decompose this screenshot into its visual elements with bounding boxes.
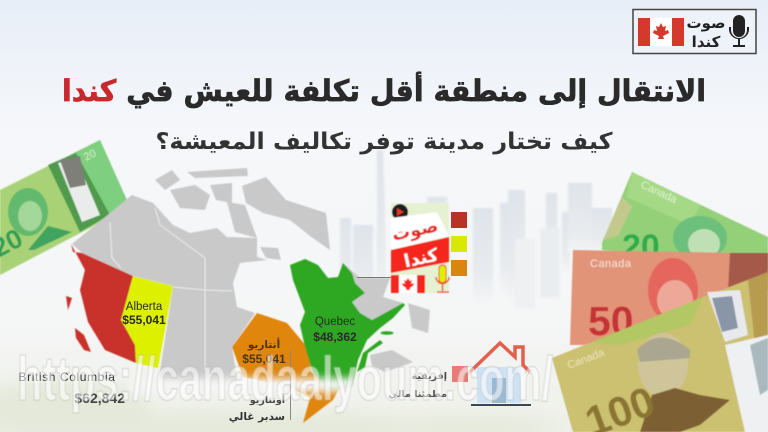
- value: British Columbia: $62,842: [74, 390, 125, 406]
- map: Gaspe crescent: [357, 340, 383, 372]
- banknote: right 20 dollars: [602, 172, 768, 270]
- banknote: 50 dollars: Canada: [590, 258, 632, 270]
- top-right logo: [633, 10, 756, 54]
- red accent: [452, 366, 468, 382]
- banknote: right 20 dollars: 20: [622, 228, 660, 266]
- center logo: [390, 203, 449, 293]
- legend: orange swatch: [451, 260, 467, 276]
- leader line: Ontario: [290, 350, 292, 420]
- label: Ontario note: أونتاريو: [249, 393, 285, 406]
- logo: name: صوت: [687, 14, 725, 32]
- label: real estate note: إفريقية: [412, 371, 447, 382]
- center logo: flag: [391, 275, 425, 293]
- value: Quebec: $48,362: [313, 330, 357, 344]
- label: Ontario: أنتاريو: [247, 337, 280, 351]
- map: province borders: [110, 208, 232, 370]
- subtitle: كيف تختار مدينة توفر تكاليف المعيشة؟: [156, 129, 613, 155]
- map: small island: [380, 331, 394, 335]
- banknote: left 20 dollars: [0, 140, 130, 275]
- map: Ontario: [232, 313, 340, 423]
- label: British Columbia: British Columbia: [19, 370, 115, 384]
- banknote: right 20 dollars: Canada: [639, 179, 680, 206]
- value: Ontario: $55,041: [242, 352, 286, 366]
- center logo: microphone: [436, 265, 449, 292]
- title: الانتقال إلى منطقة أقل تكلفة للعيش في كندا: [62, 72, 706, 109]
- legend: red swatch: [451, 212, 467, 228]
- logo: microphone: [729, 15, 749, 47]
- banknote: 50 dollars: 50: [588, 298, 634, 344]
- label: Quebec: Quebec: [315, 316, 355, 328]
- note: real estate: مطمئنا مالي: [388, 389, 447, 400]
- note: Ontario: سدبر غالي: [229, 411, 285, 423]
- logo: Canadian flag: [638, 18, 684, 46]
- label: Alberta: Alberta: [126, 301, 163, 313]
- map: British Columbia: [71, 244, 136, 363]
- map of Canada: [66, 168, 430, 423]
- value: Alberta: $55,041: [122, 313, 166, 327]
- map: gray provinces and territories: [72, 168, 430, 385]
- center logo: white word band: صوت: [390, 215, 440, 246]
- house icon: [470, 343, 531, 405]
- map: Quebec: [290, 259, 405, 390]
- banknote: 100 dollars: Canada: [566, 346, 607, 372]
- logo: name: كندا: [692, 33, 721, 51]
- background: pale trees: [0, 380, 560, 432]
- center logo: red word band: كندا: [402, 245, 441, 272]
- legend: yellow swatch: [451, 236, 467, 252]
- banknote: left 20 dollars: 20: [82, 147, 98, 164]
- background: city skyline: [340, 150, 612, 308]
- leader line: Quebec: [357, 276, 391, 278]
- map: Alberta: [121, 276, 173, 368]
- banknote: 100 dollars: [552, 272, 768, 432]
- banknote: 50 dollars: [570, 250, 768, 345]
- center logo: play button: [392, 204, 408, 220]
- map: Vancouver Island: [66, 296, 91, 352]
- faded band over the map: [130, 378, 355, 392]
